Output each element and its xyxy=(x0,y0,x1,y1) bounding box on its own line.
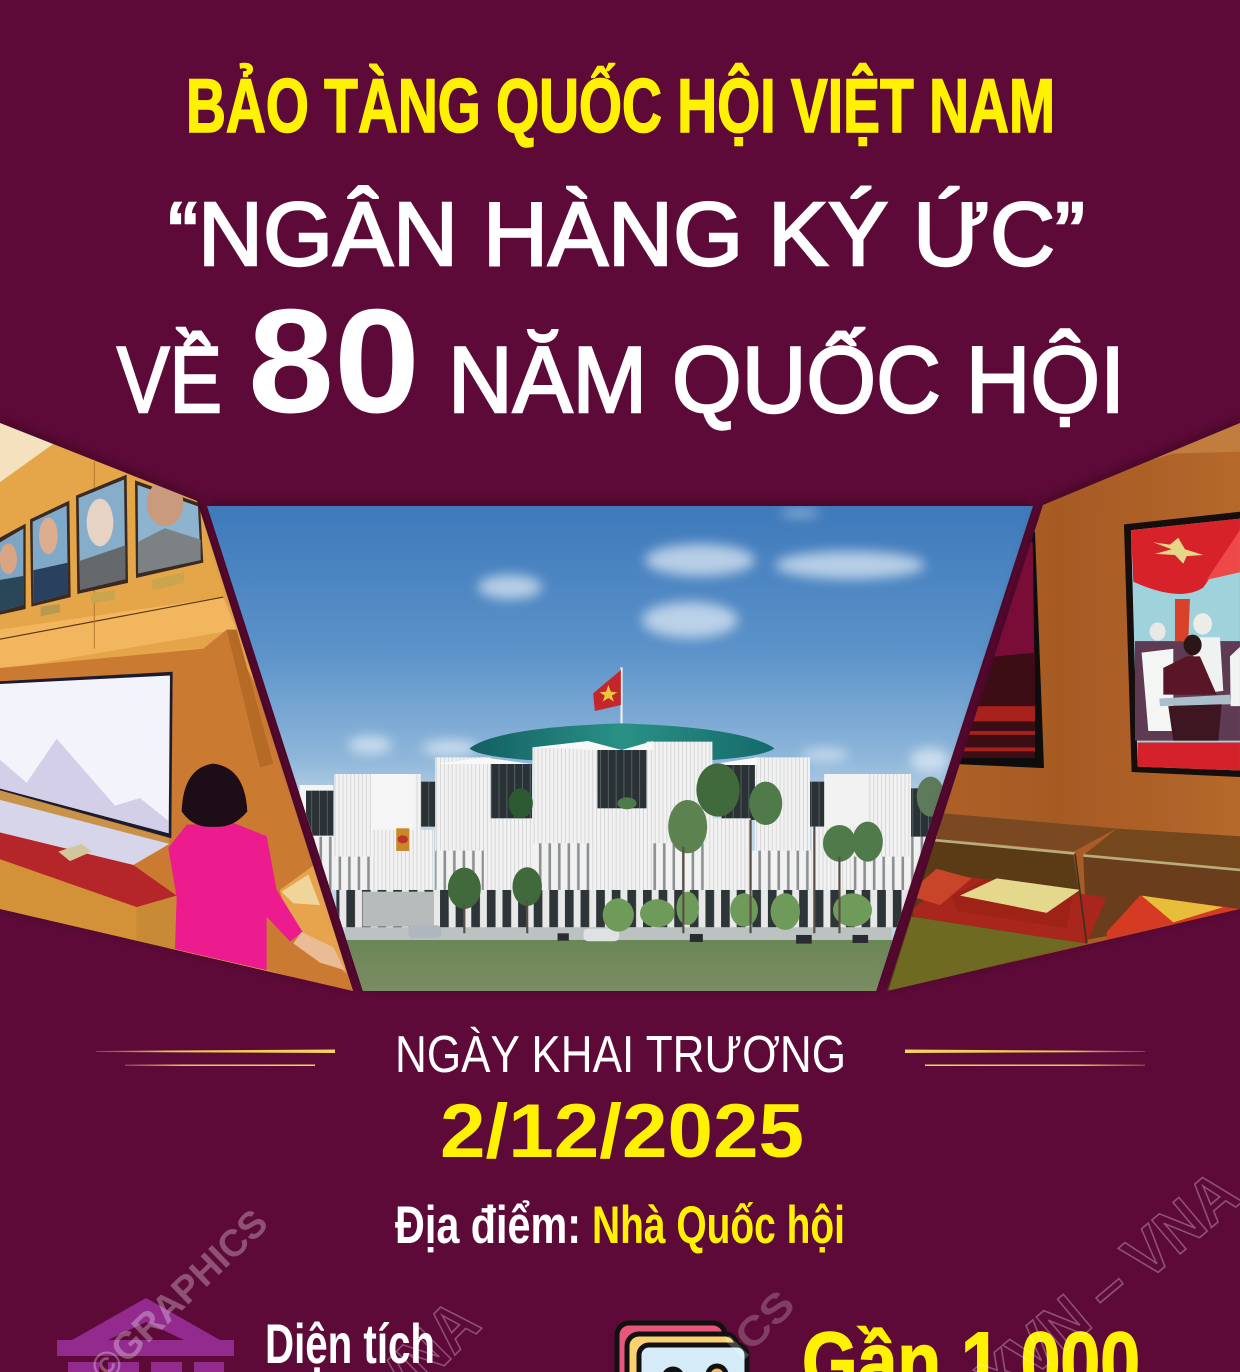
display cases xyxy=(937,813,1117,852)
icon: photo stack xyxy=(617,1323,747,1372)
flag xyxy=(620,667,623,724)
photo: centre National Assembly building xyxy=(200,500,1040,1000)
heading: 80 years of the National Assembly: VỀ xyxy=(117,327,222,432)
national emblem xyxy=(396,828,409,851)
decorative gold lines: left xyxy=(96,1050,335,1066)
location line: Nhà Quốc hội xyxy=(592,1196,845,1255)
decorative gold lines: right xyxy=(905,1050,1145,1066)
label: opening day: NGÀY KHAI TRƯƠNG xyxy=(395,1026,846,1084)
dark screen xyxy=(960,532,1044,768)
photo: right museum exhibition wall xyxy=(887,420,1240,991)
white blocks xyxy=(334,774,421,857)
heading: 80 years of the National Assembly: NĂM QUỐC HỘI xyxy=(448,327,1125,432)
background wings xyxy=(300,785,333,838)
opening date: 2/12/2025 xyxy=(440,1089,804,1174)
framed flag photo xyxy=(1124,512,1240,777)
grass xyxy=(332,940,905,993)
ground floor xyxy=(336,890,909,927)
location line: Địa điểm: xyxy=(395,1196,581,1255)
trees xyxy=(448,763,944,932)
clouds xyxy=(348,510,950,772)
heading: 80 years of the National Assembly: 80 xyxy=(248,279,420,444)
road xyxy=(345,927,892,941)
watermark: graphics centre: ICS xyxy=(717,1282,804,1368)
cars xyxy=(408,925,441,938)
heading: 80 years of the National Assembly xyxy=(117,279,1125,444)
podium xyxy=(315,837,334,890)
dome xyxy=(470,723,774,763)
icon: museum building xyxy=(57,1298,234,1372)
photo: left museum exhibition hall xyxy=(0,400,363,1012)
location line xyxy=(395,1196,845,1255)
heading: memory bank: “NGÂN HÀNG KÝ ỨC” xyxy=(168,185,1085,285)
